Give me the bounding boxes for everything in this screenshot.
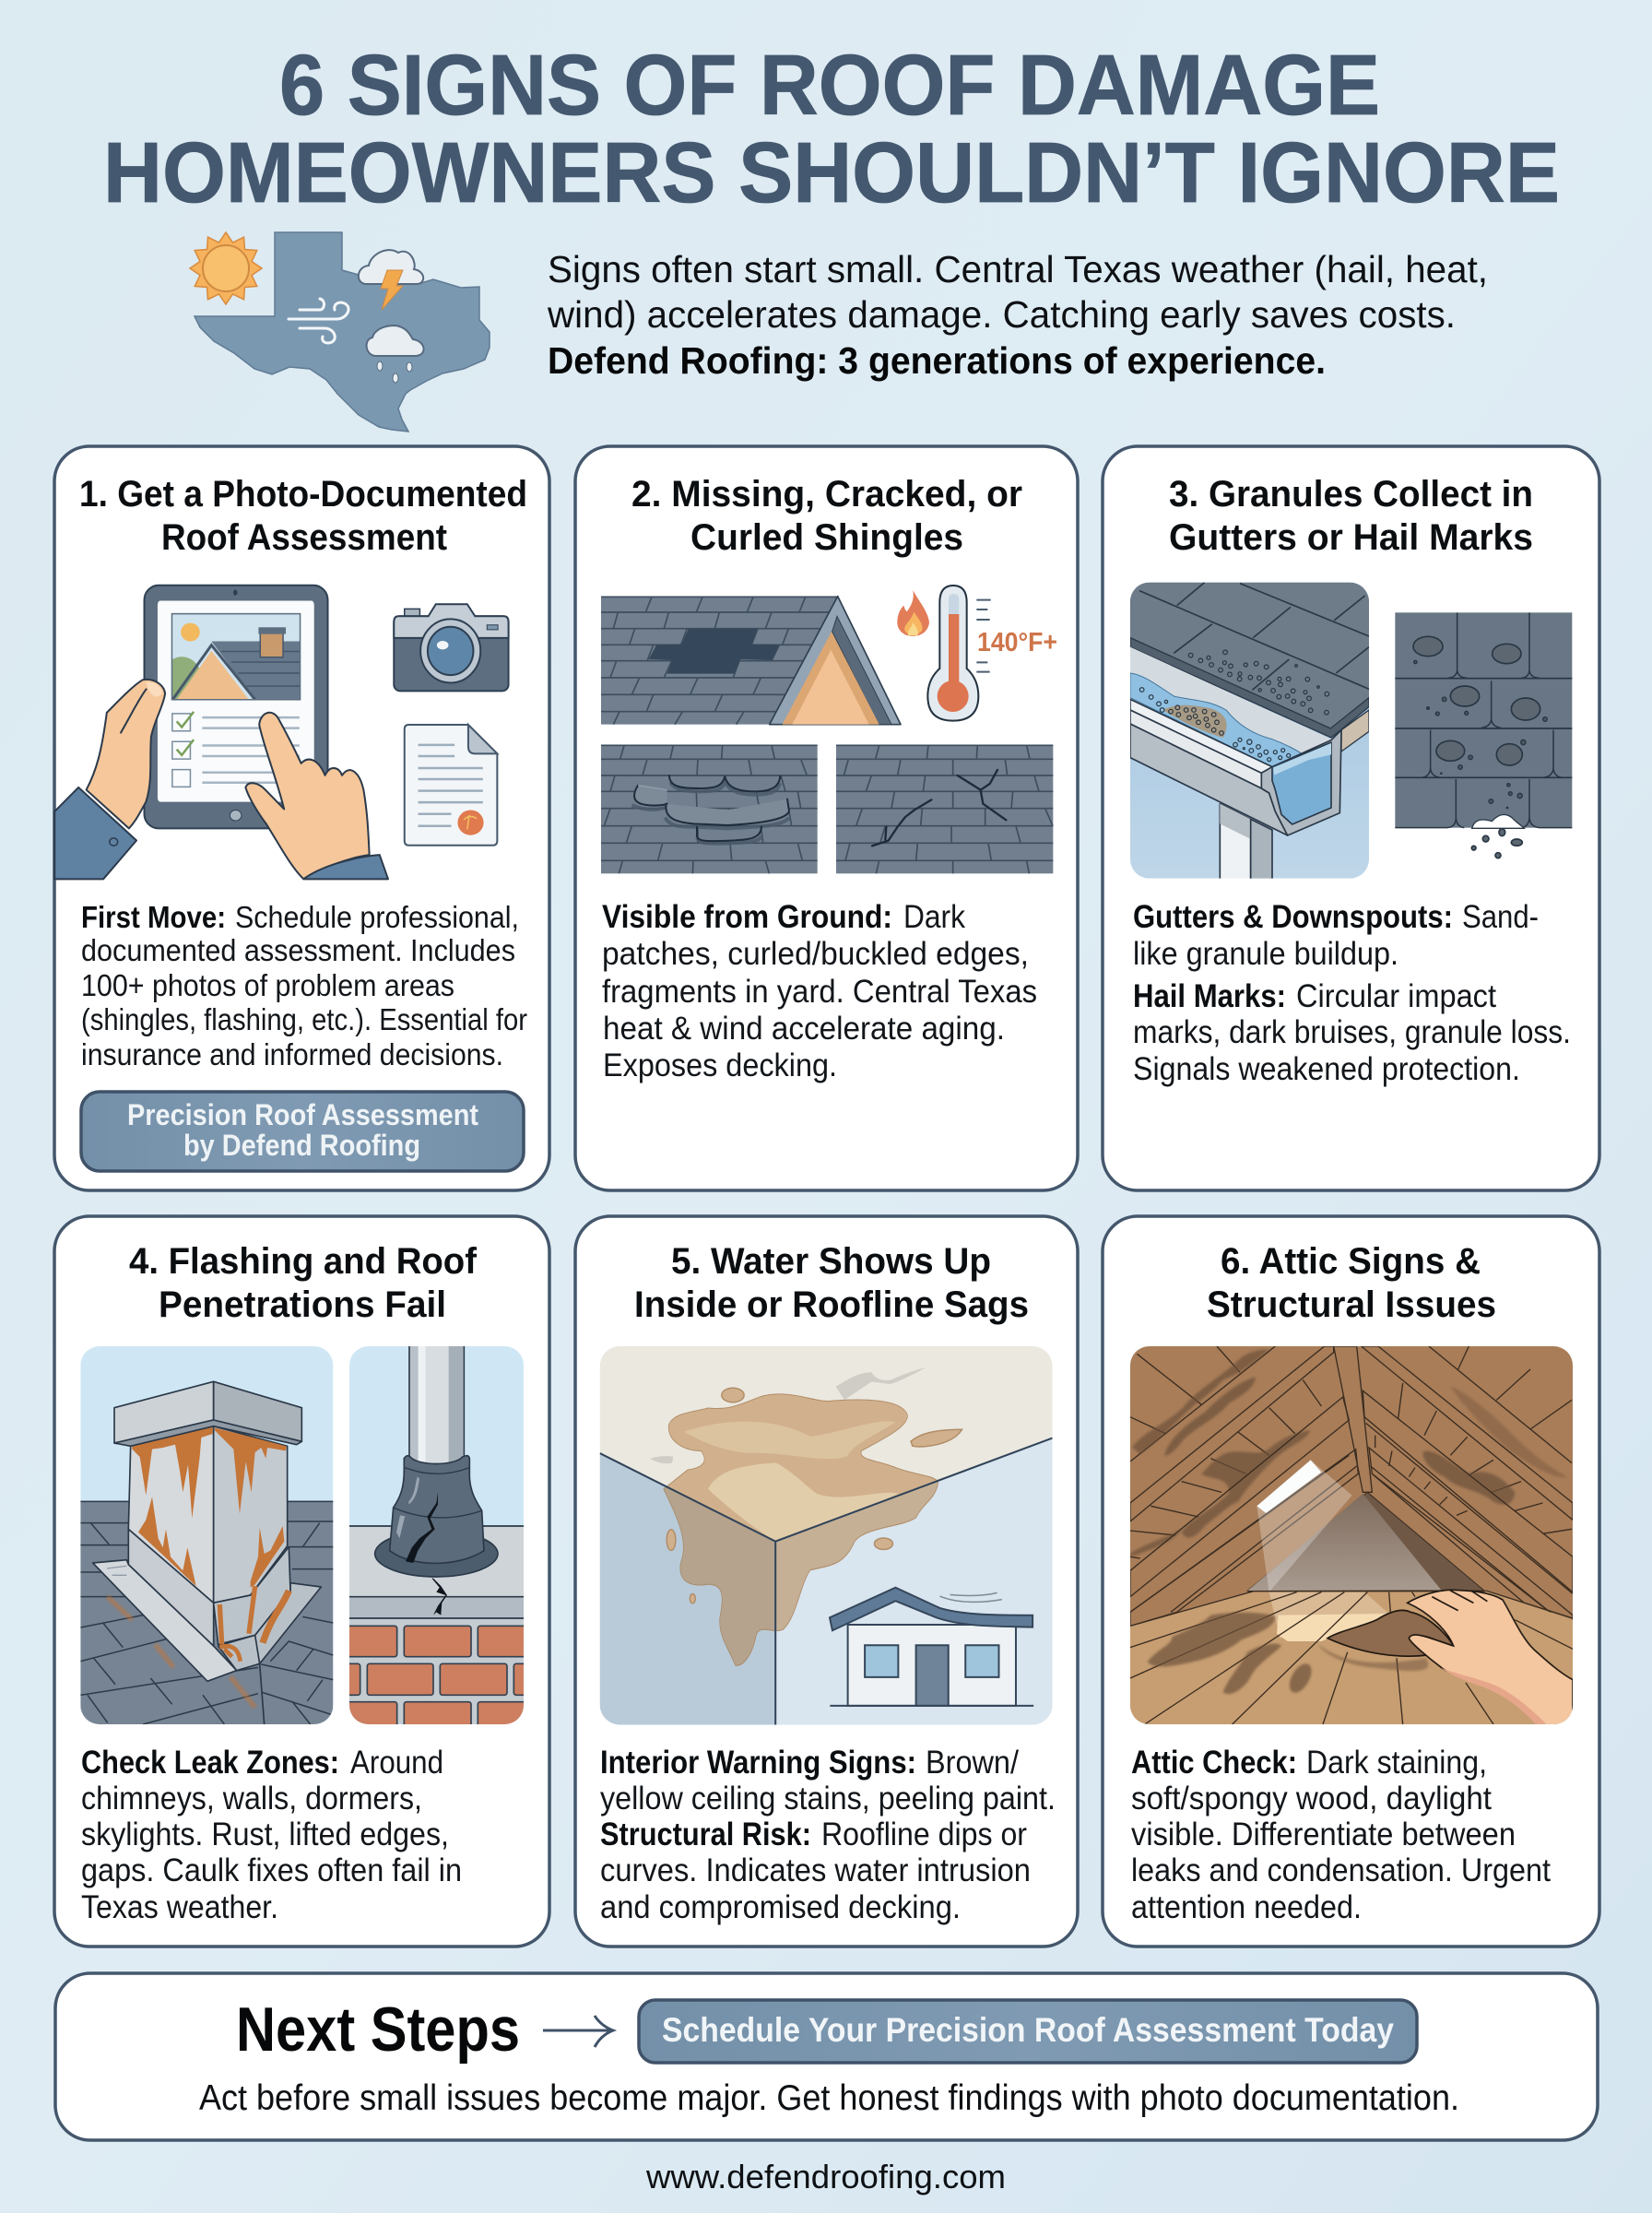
text block: Schedule professional, xyxy=(235,900,519,934)
heading xyxy=(1207,1241,1496,1325)
heading xyxy=(1169,474,1533,558)
illustration: rusted chimney flashing xyxy=(80,1346,333,1725)
heading: 6. Attic Signs & xyxy=(1221,1241,1481,1282)
button: precision roof assessment: Precision Roof Assessment xyxy=(127,1098,478,1131)
text block: Circular impact xyxy=(1296,978,1496,1014)
text block: documented assessment. Includes xyxy=(81,933,515,967)
heading: next steps: Next Steps xyxy=(236,1994,520,2065)
heading xyxy=(634,1241,1029,1325)
heading xyxy=(129,1241,478,1325)
icon: rain cloud xyxy=(367,325,424,383)
text block: 100+ photos of problem areas xyxy=(81,968,454,1002)
text block: curves. Indicates water intrusion xyxy=(600,1852,1031,1888)
title: HOMEOWNERS SHOULDN’T IGNORE xyxy=(103,124,1560,220)
heading: 2. Missing, Cracked, or xyxy=(631,474,1022,515)
text block: Sand- xyxy=(1462,899,1539,935)
title: 6 SIGNS OF ROOF DAMAGE xyxy=(279,37,1380,133)
panel: 1 photo-documented assessment xyxy=(54,446,549,1190)
icon: report document xyxy=(405,725,497,846)
text block xyxy=(1133,899,1571,1087)
intro text: Signs often start small. Central Texas weather (hail, heat, xyxy=(548,248,1488,290)
icon: storm cloud with lightning xyxy=(359,250,423,310)
heading: 1. Get a Photo-Documented xyxy=(79,474,527,515)
heading: Inside or Roofline Sags xyxy=(634,1284,1029,1325)
button: schedule assessment xyxy=(639,2000,1417,2063)
text block: patches, curled/buckled edges, xyxy=(602,936,1029,972)
heading: Gutters or Hail Marks xyxy=(1169,517,1533,558)
panel: 2 missing, cracked or curled shingles xyxy=(575,446,1078,1190)
text block: Dark xyxy=(903,899,965,935)
text block: fragments in yard. Central Texas xyxy=(602,974,1037,1010)
heading xyxy=(631,474,1022,558)
illustration: attic interior with hand xyxy=(1130,1346,1573,1726)
text block: Around xyxy=(350,1745,443,1781)
text block xyxy=(600,1745,1056,1925)
intro text xyxy=(547,248,1488,382)
heading: Curled Shingles xyxy=(690,517,963,558)
text block: Interior Warning Signs: xyxy=(600,1745,916,1781)
icon: wind xyxy=(289,299,348,343)
text block: Exposes decking. xyxy=(603,1047,837,1083)
text block: skylights. Rust, lifted edges, xyxy=(81,1817,449,1852)
panel: 5 water and sagging rooflines xyxy=(575,1216,1078,1947)
text block: Structural Risk: xyxy=(600,1817,811,1852)
footer website: www.defendroofing.com xyxy=(645,2158,1006,2195)
heading: 3. Granules Collect in xyxy=(1169,474,1533,515)
call to action text: Act before small issues become major. Get honest findings with photo documentation. xyxy=(199,2078,1459,2118)
icon: flame and thermometer 140F xyxy=(897,586,1057,721)
text block: Texas weather. xyxy=(81,1889,278,1925)
icon: hands holding tablet xyxy=(54,586,388,879)
heading: 4. Flashing and Roof xyxy=(129,1241,478,1282)
icon: sun xyxy=(190,232,262,304)
illustration: curled shingles xyxy=(601,745,818,873)
icon: Texas map with weather xyxy=(190,232,490,432)
text block: Roofline dips or xyxy=(821,1817,1027,1852)
heading: Penetrations Fail xyxy=(159,1284,446,1325)
text block: (shingles, flashing, etc.). Essential for xyxy=(81,1002,527,1036)
panel: 3 granules and hail marks xyxy=(1103,446,1599,1190)
text block: soft/spongy wood, daylight xyxy=(1131,1781,1492,1817)
text block: heat & wind accelerate aging. xyxy=(603,1011,1005,1047)
intro text: wind) accelerates damage. Catching early saves costs. xyxy=(547,293,1456,336)
button: precision roof assessment: by Defend Roofing xyxy=(183,1129,420,1162)
illustration: roof with missing shingles xyxy=(601,597,901,725)
text block: like granule buildup. xyxy=(1133,936,1398,972)
heading: 5. Water Shows Up xyxy=(671,1241,991,1282)
intro text: Defend Roofing: 3 generations of experience. xyxy=(548,339,1326,382)
text block: and compromised decking. xyxy=(600,1889,961,1925)
heading: Structural Issues xyxy=(1207,1284,1496,1325)
text block xyxy=(1131,1745,1551,1925)
text block: gaps. Caulk fixes often fail in xyxy=(81,1852,462,1888)
text block: First Move: xyxy=(81,900,226,934)
button: schedule assessment: Schedule Your Precision Roof Assessment Today xyxy=(662,2011,1394,2049)
text block: Hail Marks: xyxy=(1133,978,1286,1014)
title xyxy=(103,37,1560,220)
icon: flame and thermometer 140F: 140°F+ xyxy=(977,628,1057,657)
text block: attention needed. xyxy=(1131,1889,1362,1925)
text block: leaks and condensation. Urgent xyxy=(1131,1852,1551,1888)
text block xyxy=(81,1745,462,1925)
panel: 4 flashing and penetrations xyxy=(54,1216,549,1947)
button: precision roof assessment xyxy=(81,1092,524,1171)
text block: yellow ceiling stains, peeling paint. xyxy=(600,1781,1056,1817)
text block: insurance and informed decisions. xyxy=(81,1037,503,1071)
icon: camera xyxy=(394,604,509,691)
text block: Attic Check: xyxy=(1131,1745,1297,1781)
text block: Check Leak Zones: xyxy=(81,1745,339,1781)
panel: 6 attic signs xyxy=(1103,1216,1599,1947)
text block: marks, dark bruises, granule loss. xyxy=(1133,1014,1571,1050)
text block: Visible from Ground: xyxy=(602,899,892,935)
heading: Roof Assessment xyxy=(161,517,447,558)
text block: Gutters & Downspouts: xyxy=(1133,899,1453,935)
arrow xyxy=(543,2016,613,2047)
illustration: gutter with granules xyxy=(1130,583,1369,881)
illustration: cracked pipe boot xyxy=(344,1343,530,1733)
text block xyxy=(81,900,527,1071)
text block: visible. Differentiate between xyxy=(1131,1817,1516,1852)
text block: Dark staining, xyxy=(1306,1745,1487,1781)
text block: Brown/ xyxy=(926,1745,1019,1781)
illustration: ceiling water stain and sagging house xyxy=(600,1346,1053,1725)
heading xyxy=(79,474,527,558)
panel: next steps xyxy=(55,1973,1598,2140)
text block: chimneys, walls, dormers, xyxy=(81,1781,422,1817)
illustration: cracked shingles xyxy=(836,745,1053,873)
text block xyxy=(602,899,1037,1083)
illustration: hail impact marks xyxy=(1395,612,1572,858)
text block: Signals weakened protection. xyxy=(1133,1051,1520,1087)
